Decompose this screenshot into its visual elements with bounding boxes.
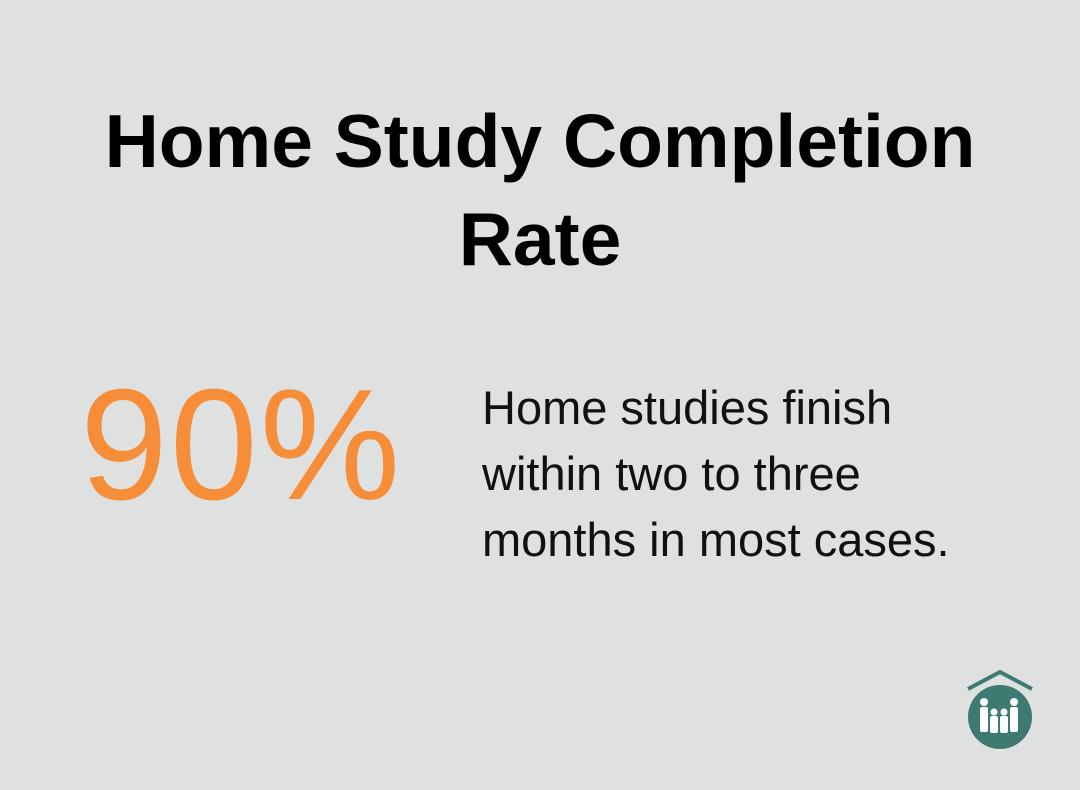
title: Home Study Completion: [105, 99, 975, 183]
description text: months in most cases.: [482, 513, 950, 566]
description text: [482, 381, 950, 566]
title: [105, 99, 975, 281]
description text: within two to three: [482, 447, 861, 500]
description text: Home studies finish: [482, 381, 892, 434]
icon: logo house with family: [967, 670, 1033, 749]
title: Rate: [459, 197, 621, 281]
big stat: 90%: 90%: [80, 357, 402, 533]
